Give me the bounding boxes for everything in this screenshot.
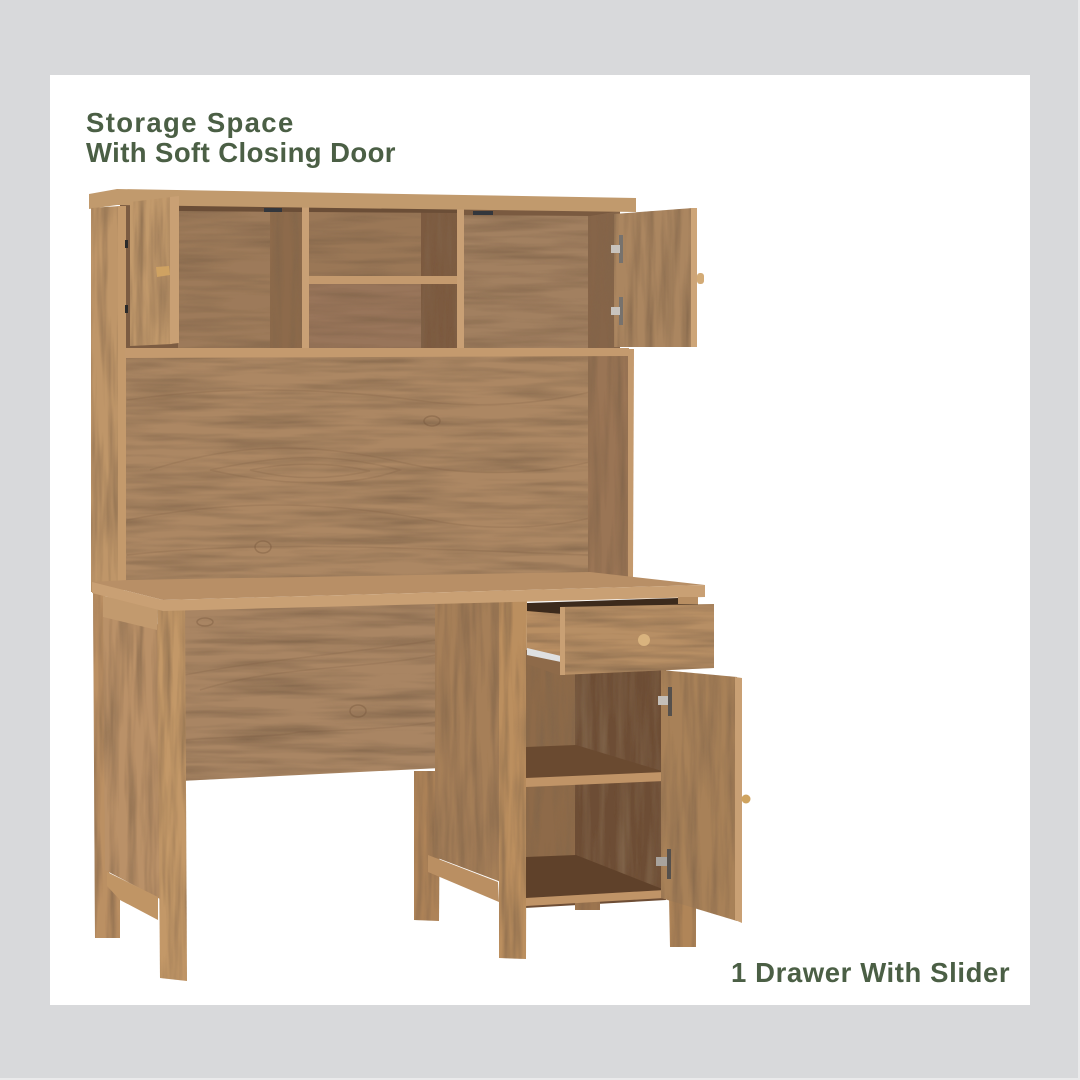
hutch left side panel — [91, 206, 126, 592]
hutch back panel — [120, 350, 595, 590]
hutch middle shelf — [125, 348, 629, 358]
hutch right side panel — [588, 349, 634, 580]
lower open door — [656, 670, 750, 923]
pedestal — [414, 598, 696, 959]
desktop — [92, 572, 705, 611]
illustration: desk with hutch — [89, 189, 750, 981]
heading: storage space: With Soft Closing Door — [86, 137, 396, 168]
hutch top board — [89, 189, 636, 212]
right open door — [611, 208, 704, 347]
heading: storage space — [86, 107, 396, 168]
caption: drawer: 1 Drawer With Slider — [731, 957, 1010, 988]
icon: door hinges — [611, 235, 623, 325]
open drawer — [527, 597, 714, 676]
white panel — [50, 75, 1030, 1005]
heading: storage space: Storage Space — [86, 107, 295, 138]
under-desk modesty panel — [180, 600, 440, 781]
icon: lower door hinges — [656, 687, 672, 879]
left desk legs — [93, 590, 187, 981]
left open door — [125, 196, 179, 346]
hutch upper shelves — [120, 200, 620, 352]
